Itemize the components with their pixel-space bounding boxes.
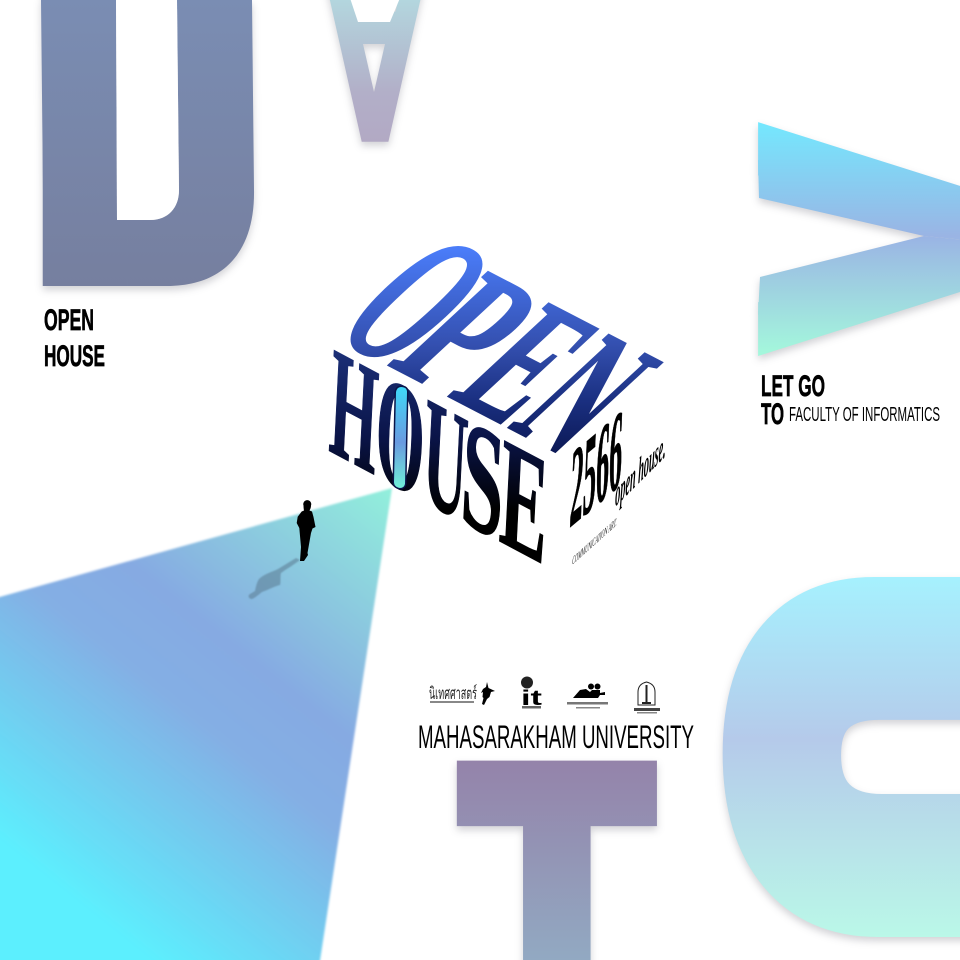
title: HOUSE on left face: S [458,383,508,575]
logo: it [521,676,542,710]
logo: film camera [567,684,608,708]
year 2566: 2566 [568,386,625,554]
title: HOUSE on left face: H [326,313,382,508]
logo: communication arts: นิเทศศาสตร์ [429,684,477,703]
heading: MAHASARAKHAM UNIVERSITY: MAHASARAKHAM UNIVERSITY [418,719,694,755]
icon: walking silhouette [297,500,316,561]
logo row [429,676,660,714]
title: OPEN on top face: P [352,238,583,427]
heading: HOUSE: HOUSE [44,340,105,373]
title: HOUSE on left face: U [420,363,471,556]
title: OPEN on top face: N [473,301,699,487]
heading: TO: TO [761,398,784,431]
heading: OPEN: OPEN [44,304,94,337]
title: OPEN on top face: O [293,199,542,403]
icon: glowing slit in letter O [394,387,407,488]
text: COMMUNICATION ART.: COMMUNICATION ART. [572,516,617,569]
title: OPEN on top face: E [413,270,642,458]
title: HOUSE on left face: E [497,403,552,598]
icon: cast shadow [249,558,300,599]
logo: it: it [521,687,542,710]
logo: communication arts [429,682,495,705]
logo: university seal [634,682,660,714]
title: HOUSE on left face: O [372,337,429,533]
heading: LET GO: LET GO [761,370,825,403]
light beam [0,488,392,960]
person and shadow [249,500,316,599]
text: open house.: open house. [615,425,666,516]
